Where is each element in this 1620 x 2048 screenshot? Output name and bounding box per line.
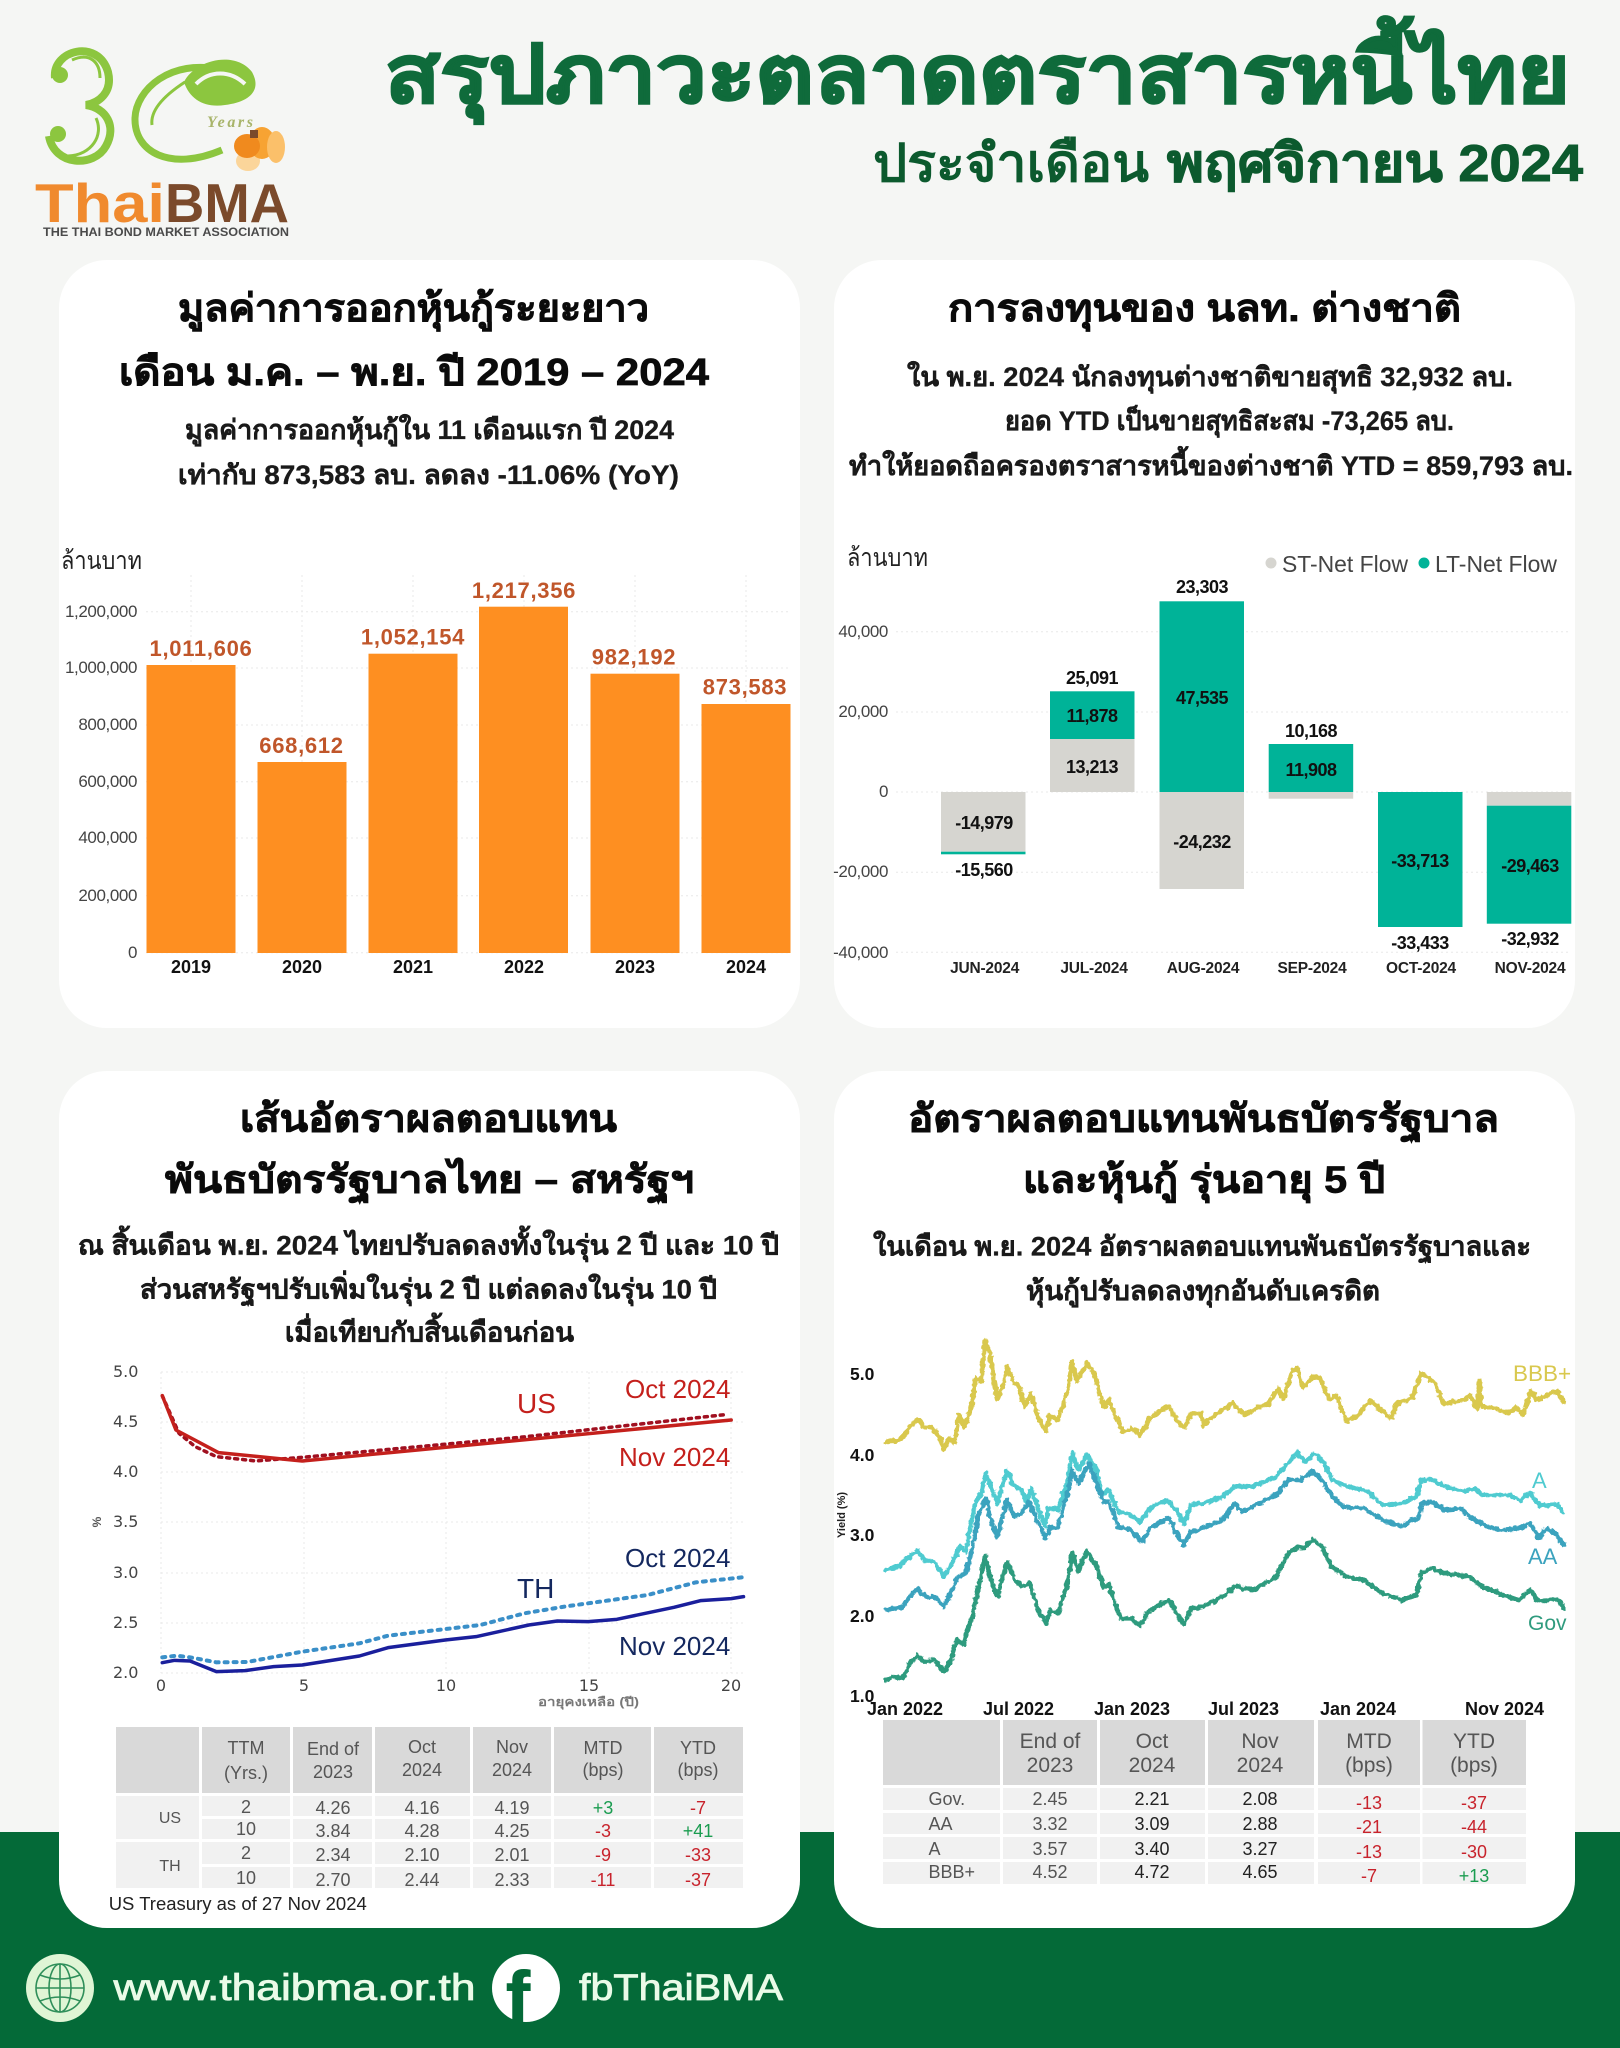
line chart: US and Thai yield curves: TH <box>517 1573 554 1604</box>
stacked bar chart: net flow: 40,000 <box>838 622 888 641</box>
text: issuance summary: มูลค่าการออกหุ้นกู้ใน 11 เดือนแรก ปี 2024 <box>185 414 674 447</box>
logo: ThaiBMA 30 years: BMA <box>165 172 289 234</box>
stacked bar chart: net flow: JUL-2024 <box>1060 960 1128 977</box>
stacked bar chart: net flow: 23,303 <box>1176 577 1229 597</box>
line chart: yields by credit rating: BBB+ <box>1513 1361 1571 1386</box>
line chart: US and Thai yield curves: 5 <box>299 1676 309 1695</box>
line chart: yields by credit rating: AA <box>1528 1544 1558 1569</box>
line chart: yields by credit rating: Jan 2024 <box>1320 1699 1396 1719</box>
stacked bar chart: net flow: 20,000 <box>838 702 888 721</box>
table: government yields: 2.34 <box>315 1845 351 1865</box>
stacked bar chart: net flow: 47,535 <box>1176 688 1229 708</box>
heading: yield curve: พันธบัตรรัฐบาลไทย – สหรัฐฯ <box>165 1158 694 1204</box>
table: government yields: 4.28 <box>404 1821 440 1841</box>
table: 5-year yields: -21 <box>1356 1817 1382 1837</box>
table: 5-year yields: -7 <box>1361 1866 1377 1886</box>
line chart: US and Thai yield curves: Nov 2024 <box>619 1442 730 1472</box>
table: government yields: TH <box>159 1858 181 1875</box>
line chart: yields by credit rating: 4.0 <box>850 1445 875 1465</box>
line chart: US and Thai yield curves: 4.5 <box>113 1412 138 1431</box>
table: 5-year yields: -30 <box>1461 1842 1487 1862</box>
table: 5-year yields: +13 <box>1459 1866 1489 1886</box>
line chart: yields by credit rating: Jan 2022 <box>867 1699 943 1719</box>
line chart: US and Thai yield curves: Oct 2024 <box>625 1543 731 1573</box>
logo: ThaiBMA 30 years: Years <box>207 114 253 131</box>
line chart: yields by credit rating: Nov 2024 <box>1465 1699 1544 1719</box>
table: government yields: +41 <box>683 1821 713 1841</box>
table: government yields: 4.19 <box>494 1798 530 1818</box>
stacked bar chart: net flow: -29,463 <box>1501 856 1559 876</box>
table: government yields: -9 <box>595 1845 611 1865</box>
line chart: yields by credit rating: Yield (%) <box>836 1492 848 1538</box>
table: 5-year yields: -44 <box>1461 1817 1487 1837</box>
heading: issuance: เดือน ม.ค. – พ.ย. ปี 2019 – 2024 <box>119 352 709 394</box>
table: 5-year yields: -13 <box>1356 1793 1382 1813</box>
table: 5-year yields: End of <box>1020 1730 1081 1753</box>
stacked bar chart: net flow: JUN-2024 <box>950 960 1020 977</box>
bar chart: issuance by year: 1,200,000 <box>65 602 137 621</box>
table: government yields: 2 <box>241 1797 251 1817</box>
table: 5-year yields: 2023 <box>1027 1754 1073 1777</box>
stacked bar chart: net flow: OCT-2024 <box>1386 960 1457 977</box>
icon: facebook: f <box>506 1958 531 2038</box>
line chart: yields by credit rating: Jan 2023 <box>1094 1699 1170 1719</box>
line chart: yields by credit rating: Jul 2022 <box>983 1699 1054 1719</box>
website: www.thaibma.or.th <box>112 1967 476 2008</box>
table: government yields: US <box>159 1810 181 1827</box>
logo: ThaiBMA 30 years <box>35 51 289 239</box>
line chart: US and Thai yield curves: 20 <box>721 1676 741 1695</box>
legend: ST-Net Flow <box>1282 551 1408 577</box>
stacked bar chart: net flow: ล้านบาท <box>847 544 928 572</box>
icon: facebook <box>492 1954 560 2038</box>
footer band <box>0 1832 1620 2048</box>
table: 5-year yields: (bps) <box>1345 1754 1393 1777</box>
line chart: yields by credit rating: Gov <box>1528 1612 1567 1635</box>
legend: LT-Net Flow <box>1435 551 1557 577</box>
line chart: yields by credit rating: Jul 2023 <box>1208 1699 1279 1719</box>
line chart: yields by credit rating: 5.0 <box>850 1364 875 1384</box>
stacked bar chart: net flow: NOV-2024 <box>1495 960 1566 977</box>
table: 5-year yields: 2.21 <box>1134 1789 1170 1809</box>
table: government yields: (bps) <box>677 1760 719 1780</box>
table: 5-year yields: 3.27 <box>1242 1839 1278 1859</box>
table: government yields: 4.26 <box>315 1798 351 1818</box>
line chart: yields by credit rating: 1.0 <box>850 1686 875 1706</box>
stacked bar chart: net flow <box>833 544 1571 977</box>
table: 5-year yields: 2.08 <box>1242 1789 1278 1809</box>
text: 5-year yields summary: หุ้นกู้ปรับลดลงทุกอันดับเครดิต <box>1026 1276 1380 1308</box>
icon: globe <box>26 1954 94 2022</box>
table: 5-year yields: 4.65 <box>1242 1862 1278 1882</box>
table: 5-year yields: 2024 <box>1129 1754 1176 1777</box>
table: government yields: 10 <box>236 1819 256 1839</box>
line chart: US and Thai yield curves: 3.0 <box>113 1563 138 1582</box>
table: government yields: 10 <box>236 1868 256 1888</box>
table: 5-year yields: (bps) <box>1450 1754 1498 1777</box>
table: government yields: 2 <box>241 1843 251 1863</box>
stacked bar chart: net flow: -40,000 <box>833 943 888 962</box>
line chart: US and Thai yield curves: Nov 2024 <box>619 1631 730 1661</box>
table: government yields: 2.10 <box>404 1845 440 1865</box>
footnote: US Treasury as of 27 Nov 2024 <box>109 1893 367 1914</box>
bar chart: issuance by year: 400,000 <box>78 828 137 847</box>
text: 5-year yields summary: ในเดือน พ.ย. 2024 อัตราผลตอบแทนพันธบัตรรัฐบาลและ <box>873 1230 1531 1264</box>
table: government yields: Oct <box>408 1737 436 1757</box>
table: government yields: (Yrs.) <box>224 1763 268 1783</box>
table: 5-year yields: 3.57 <box>1032 1839 1068 1859</box>
table: 5-year yields: AA <box>928 1814 953 1834</box>
stacked bar chart: net flow: 11,908 <box>1285 760 1337 780</box>
table: 5-year yields: 2.88 <box>1242 1814 1278 1834</box>
line chart: yields by credit rating: 3.0 <box>850 1525 875 1545</box>
table: 5-year yields: YTD <box>1453 1730 1495 1753</box>
stacked bar chart: net flow: 11,878 <box>1066 706 1118 726</box>
table: 5-year yields: 4.72 <box>1134 1862 1170 1882</box>
stacked bar chart: net flow: 0 <box>879 782 888 801</box>
table: 5-year yields: MTD <box>1346 1730 1392 1753</box>
stacked bar chart: net flow: -20,000 <box>833 862 888 881</box>
text: yield curve summary <box>78 1224 779 1348</box>
text: 5-year yields summary <box>873 1230 1531 1308</box>
bar chart: issuance by year: 2020 <box>282 957 322 977</box>
table: government yields <box>116 1727 743 1890</box>
table: government yields: 4.25 <box>494 1821 530 1841</box>
table: government yields: -3 <box>595 1821 611 1841</box>
panel: yield curves <box>59 1071 800 1928</box>
table: government yields: 2.70 <box>315 1870 351 1890</box>
table: government yields: YTD <box>680 1738 716 1758</box>
bar chart: issuance by year: 1,011,606 <box>150 636 252 661</box>
table: 5-year yields: -13 <box>1356 1842 1382 1862</box>
text: yield curve summary: เมื่อเทียบกับสิ้นเดือนก่อน <box>285 1312 575 1348</box>
line chart: yields by credit rating <box>836 1341 1571 1719</box>
table: government yields: -11 <box>591 1870 615 1890</box>
table: government yields: End of <box>307 1739 360 1759</box>
text: issuance summary: เท่ากับ 873,583 ลบ. ลดลง -11.06% (YoY) <box>178 460 679 490</box>
table: government yields: -37 <box>685 1870 711 1890</box>
table: 5-year yields: Oct <box>1136 1730 1168 1753</box>
stacked bar chart: net flow: 10,168 <box>1285 721 1338 741</box>
subtitle: พฤศจิกายน 2024 <box>1167 135 1583 193</box>
subtitle <box>873 135 1583 193</box>
table: government yields: MTD <box>584 1738 622 1758</box>
table: government yields: +3 <box>593 1798 613 1818</box>
table: government yields: 2.33 <box>494 1870 530 1890</box>
heading: 5-year yields <box>908 1098 1499 1204</box>
text: issuance summary <box>178 414 679 490</box>
stacked bar chart: net flow: -14,979 <box>955 813 1013 833</box>
line chart: US and Thai yield curves: อายุคงเหลือ (ปี) <box>538 1695 639 1710</box>
table: government yields: TTM <box>228 1738 264 1758</box>
table: 5-year yields: 2024 <box>1237 1754 1284 1777</box>
table: government yields: 2024 <box>492 1760 532 1780</box>
line chart: US and Thai yield curves: 3.5 <box>113 1512 138 1531</box>
facebook handle: fbThaiBMA <box>579 1967 783 2008</box>
stacked bar chart: net flow: -33,433 <box>1391 933 1449 953</box>
text: foreign flow summary: ยอด YTD เป็นขายสุทธิสะสม -73,265 ลบ. <box>1005 403 1454 438</box>
line chart: yields by credit rating: A <box>1532 1468 1547 1493</box>
heading: yield curve: เส้นอัตราผลตอบแทน <box>240 1098 617 1140</box>
table: 5-year yields: Gov. <box>928 1789 965 1809</box>
text: foreign flow summary <box>849 361 1573 481</box>
bar chart: issuance by year: 873,583 <box>703 674 787 700</box>
line chart: US and Thai yield curves: 0 <box>156 1676 166 1695</box>
table: government yields: Nov <box>496 1737 528 1757</box>
table: 5-year yields: 3.40 <box>1134 1839 1170 1859</box>
table: government yields: 3.84 <box>315 1821 351 1841</box>
logo: ThaiBMA 30 years: THE THAI BOND MARKET ASSOCIATION <box>43 225 289 239</box>
line chart: US and Thai yield curves: 10 <box>436 1676 456 1695</box>
heading: issuance: มูลค่าการออกหุ้นกู้ระยะยาว <box>178 288 649 332</box>
title: สรุปภาวะตลาดตราสารหนี้ไทย <box>385 16 1570 125</box>
table: 5-year yields: 3.09 <box>1134 1814 1170 1834</box>
stacked bar chart: net flow: 25,091 <box>1066 668 1119 688</box>
bar chart: issuance by year: 800,000 <box>78 715 137 734</box>
table: 5-year yields: -37 <box>1461 1793 1487 1813</box>
bar chart: issuance by year: 200,000 <box>78 886 137 905</box>
table: 5-year yields <box>883 1720 1526 1886</box>
bar chart: issuance by year <box>61 547 790 977</box>
table: 5-year yields: A <box>928 1839 941 1859</box>
table: government yields: 2024 <box>402 1760 442 1780</box>
bar chart: issuance by year: 600,000 <box>78 772 137 791</box>
bar chart: issuance by year: 2019 <box>171 957 211 977</box>
bar chart: issuance by year: 2021 <box>393 957 433 977</box>
heading: issuance <box>119 288 709 394</box>
line chart: US and Thai yield curves: 2.0 <box>113 1663 138 1682</box>
line chart: US and Thai yield curves: Oct 2024 <box>625 1374 731 1404</box>
table: government yields: 2.01 <box>494 1845 530 1865</box>
stacked bar chart: net flow: SEP-2024 <box>1277 960 1347 977</box>
panel: 5-year yields <box>834 1071 1575 1928</box>
line chart: US and Thai yield curves <box>90 1362 744 1710</box>
table: government yields: 2.44 <box>404 1870 440 1890</box>
line chart: US and Thai yield curves: 4.0 <box>113 1462 138 1481</box>
table: 5-year yields: 3.32 <box>1032 1814 1068 1834</box>
stacked bar chart: net flow: -32,932 <box>1501 929 1559 949</box>
line chart: yields by credit rating: 2.0 <box>850 1606 875 1626</box>
line chart: US and Thai yield curves: 15 <box>579 1676 599 1695</box>
heading: foreign investors: การลงทุนของ นลท. ต่างชาติ <box>948 288 1461 332</box>
line chart: US and Thai yield curves: 2.5 <box>113 1613 138 1632</box>
bar chart: issuance by year: 0 <box>128 943 137 962</box>
table: government yields: 2023 <box>313 1762 353 1782</box>
stacked bar chart: net flow: -33,713 <box>1391 851 1449 871</box>
table: government yields: (bps) <box>582 1760 624 1780</box>
line chart: US and Thai yield curves: 5.0 <box>113 1362 138 1381</box>
stacked bar chart: net flow: 13,213 <box>1066 757 1119 777</box>
table: government yields: -7 <box>690 1798 706 1818</box>
bar chart: issuance by year: ล้านบาท <box>61 547 142 575</box>
stacked bar chart: net flow: -24,232 <box>1173 832 1231 852</box>
stacked bar chart: net flow: AUG-2024 <box>1167 960 1240 977</box>
bar chart: issuance by year: 1,052,154 <box>361 624 465 650</box>
heading: yield curve <box>165 1098 694 1204</box>
table: 5-year yields: 4.52 <box>1032 1862 1068 1882</box>
heading: 5-year yields: และหุ้นกู้ รุ่นอายุ 5 ปี <box>1023 1160 1385 1204</box>
bar chart: issuance by year: 1,217,356 <box>472 578 576 603</box>
heading: 5-year yields: อัตราผลตอบแทนพันธบัตรรัฐบาล <box>908 1098 1499 1144</box>
panel: foreign investment <box>833 260 1575 1028</box>
text: foreign flow summary: ใน พ.ย. 2024 นักลงทุนต่างชาติขายสุทธิ 32,932 ลบ. <box>907 361 1513 394</box>
legend <box>1266 551 1557 577</box>
bar chart: issuance by year: 982,192 <box>592 644 676 670</box>
line chart: US and Thai yield curves: US <box>517 1388 556 1419</box>
bar chart: issuance by year: 2022 <box>504 957 544 977</box>
subtitle: ประจำเดือน <box>873 135 1149 193</box>
table: government yields: 4.16 <box>404 1798 440 1818</box>
stacked bar chart: net flow: -15,560 <box>955 860 1013 880</box>
bar chart: issuance by year: 2024 <box>726 957 766 977</box>
panel: long-term corporate bond issuance <box>59 260 800 1028</box>
logo: ThaiBMA 30 years: Thai <box>35 172 165 234</box>
text: yield curve summary: ส่วนสหรัฐฯปรับเพิ่มในรุ่น 2 ปี แต่ลดลงในรุ่น 10 ปี <box>140 1270 717 1308</box>
table: 5-year yields: BBB+ <box>928 1862 975 1882</box>
bar chart: issuance by year: 1,000,000 <box>65 658 137 677</box>
text: foreign flow summary: ทำให้ยอดถือครองตราสารหนี้ของต่างชาติ YTD = 859,793 ลบ. <box>849 445 1573 481</box>
table: government yields: -33 <box>685 1845 711 1865</box>
text: yield curve summary: ณ สิ้นเดือน พ.ย. 2024 ไทยปรับลดลงทั้งในรุ่น 2 ปี และ 10 ปี <box>78 1224 779 1262</box>
table: 5-year yields: Nov <box>1241 1730 1279 1753</box>
line chart: US and Thai yield curves: % <box>90 1516 104 1527</box>
table: 5-year yields: 2.45 <box>1032 1789 1068 1809</box>
bar chart: issuance by year: 668,612 <box>259 733 344 758</box>
bar chart: issuance by year: 2023 <box>615 957 655 977</box>
